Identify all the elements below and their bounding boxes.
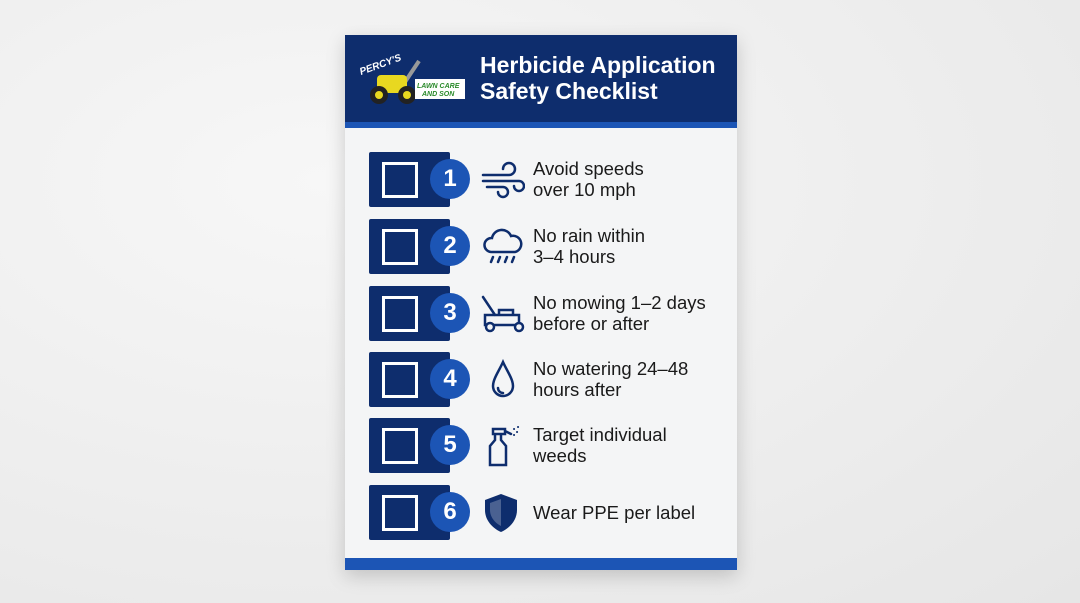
item 2: 3–4 hours xyxy=(533,246,615,267)
icon: drop xyxy=(492,359,514,398)
logo: AND SON xyxy=(421,91,455,98)
item 5: 5 xyxy=(443,431,457,458)
item 1: Avoid speeds xyxy=(533,158,644,179)
item 4: hours after xyxy=(533,379,621,400)
item 1 xyxy=(369,152,644,207)
icon: spray bottle xyxy=(488,426,520,466)
item 4 xyxy=(369,352,688,407)
item 3: before or after xyxy=(533,313,649,334)
icon: shield xyxy=(485,494,517,532)
header xyxy=(345,35,737,122)
item 3: 3 xyxy=(443,299,457,326)
item 3: No mowing 1–2 days xyxy=(533,292,706,313)
icon: mower xyxy=(482,296,524,332)
title: Herbicide Application xyxy=(480,52,716,78)
logo: LAWN CARE xyxy=(417,83,460,90)
item 2: 2 xyxy=(443,232,457,259)
item 2: No rain within xyxy=(533,225,645,246)
item 6: 6 xyxy=(443,498,457,525)
item 6: Wear PPE per label xyxy=(533,502,695,523)
item 2 xyxy=(369,219,645,274)
item 1: 1 xyxy=(443,165,457,192)
item 4: No watering 24–48 xyxy=(533,358,688,379)
title xyxy=(480,52,716,104)
item 4: 4 xyxy=(443,365,457,392)
poster xyxy=(345,35,737,570)
item 1: over 10 mph xyxy=(533,179,636,200)
icon: rain cloud xyxy=(483,228,522,264)
item 3 xyxy=(369,286,706,341)
title: Safety Checklist xyxy=(480,78,658,104)
logo xyxy=(359,53,465,104)
item 6 xyxy=(369,485,695,540)
item 5 xyxy=(369,418,667,473)
item 5: Target individual xyxy=(533,424,667,445)
item 5: weeds xyxy=(533,445,586,466)
icon: wind xyxy=(482,162,525,198)
